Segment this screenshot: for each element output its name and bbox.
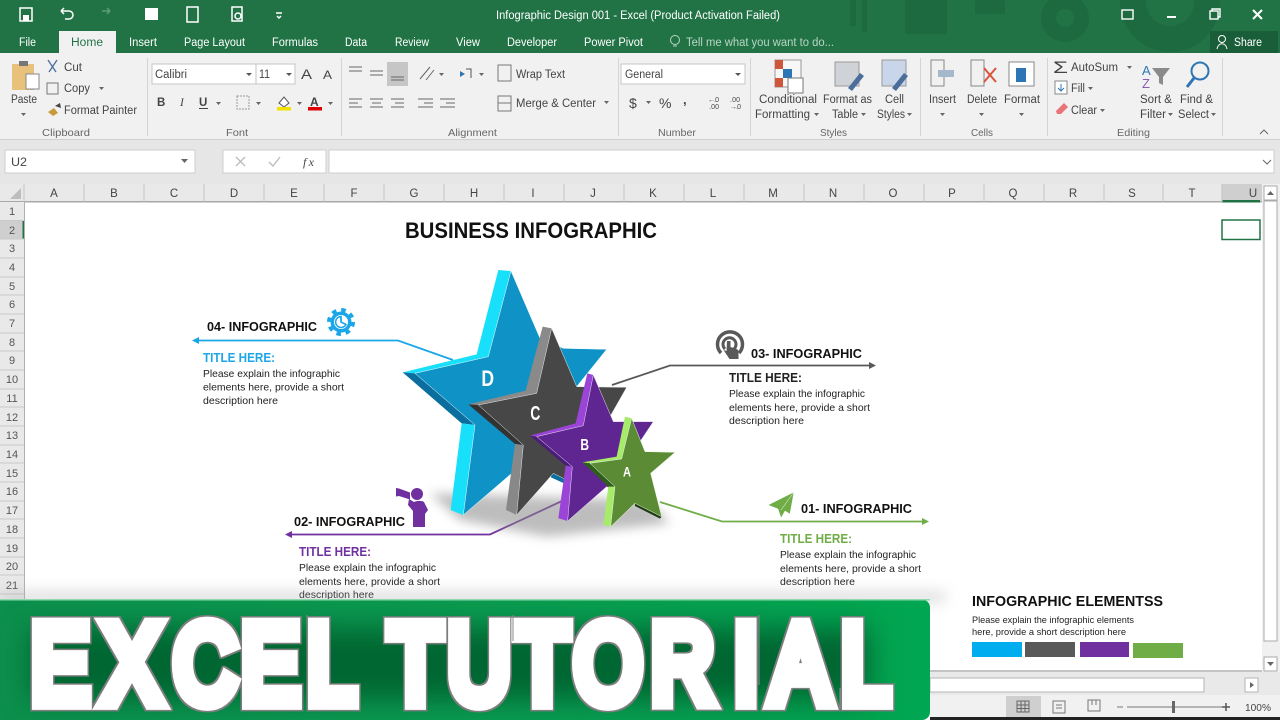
styles group: Styles <box>877 109 905 121</box>
block 02: Please explain the infographic <box>299 562 436 574</box>
number group: $ <box>629 95 637 111</box>
column headers: L <box>710 188 717 200</box>
star B: B <box>580 437 589 454</box>
styles group: Formatting <box>755 109 810 121</box>
block 03 <box>612 332 876 427</box>
column headers: F <box>350 188 358 200</box>
styles group: Table <box>832 109 858 121</box>
block 02: 02- INFOGRAPHIC <box>294 514 406 529</box>
block 01: TITLE HERE: <box>780 531 852 546</box>
status bar: 100% <box>1245 702 1271 714</box>
arrow 03 <box>612 362 876 385</box>
column headers: I <box>531 188 535 200</box>
main heading: BUSINESS INFOGRAPHIC <box>405 218 657 243</box>
window controls <box>1122 9 1262 19</box>
font group: U <box>199 97 207 109</box>
clipboard group: Clipboard <box>42 127 90 139</box>
row headers <box>0 202 24 600</box>
ribbon tabs: Page Layout <box>184 37 246 49</box>
row headers: 14 <box>6 449 18 461</box>
row headers: 9 <box>9 355 15 367</box>
number group: .00 <box>730 97 740 104</box>
block 04: description here <box>203 395 278 407</box>
font group: I <box>179 97 185 109</box>
row headers: 20 <box>6 561 18 573</box>
number group <box>621 64 745 139</box>
row headers: 16 <box>6 486 18 498</box>
number group: Number <box>658 127 696 139</box>
clipboard group: Copy <box>64 83 90 95</box>
ribbon tabs: Tell me what you want to do... <box>686 37 834 49</box>
block 03: 03- INFOGRAPHIC <box>751 346 863 361</box>
editing group: Find & <box>1180 94 1213 106</box>
horizontal scrollbar <box>930 672 1280 695</box>
row headers: 4 <box>9 262 15 274</box>
block 01: 01- INFOGRAPHIC <box>801 501 913 516</box>
block 03: TITLE HERE: <box>729 370 802 385</box>
star D <box>403 270 607 515</box>
row headers: 1 <box>9 206 15 218</box>
font group: B <box>157 97 165 109</box>
row headers: 2 <box>9 225 15 237</box>
row headers: 18 <box>6 524 18 536</box>
row headers: 3 <box>9 243 15 255</box>
3D star graphic <box>403 270 675 537</box>
row headers: 21 <box>6 580 18 592</box>
ribbon <box>0 53 1280 140</box>
alignment group <box>349 62 609 139</box>
window title: Infographic Design 001 - Excel (Product Activation Failed) <box>496 10 780 22</box>
legend: infographic elements <box>972 593 1183 658</box>
block 02: TITLE HERE: <box>299 544 371 559</box>
styles group <box>755 60 912 139</box>
editing group: Clear <box>1071 105 1097 117</box>
selected cell U2 <box>1222 220 1260 240</box>
row headers: 5 <box>9 281 15 293</box>
ribbon tabs: Review <box>395 37 430 49</box>
alignment group: Alignment <box>448 127 497 139</box>
block 03: Please explain the infographic <box>729 388 865 400</box>
block 01: description here <box>780 576 855 588</box>
font group: Calibri <box>155 69 187 81</box>
row headers: 17 <box>6 505 18 517</box>
status bar <box>930 695 1280 720</box>
ribbon tabs <box>19 31 1278 53</box>
clipboard group <box>11 60 137 139</box>
vertical scrollbar <box>930 184 1280 674</box>
legend: infographic elements: INFOGRAPHIC ELEMENTSS <box>972 593 1163 610</box>
font group: A <box>323 70 332 82</box>
styles group: Cell <box>885 94 904 106</box>
column headers: N <box>829 188 837 200</box>
icon: gear <box>329 310 353 334</box>
title bar <box>0 0 1280 53</box>
block 04: Please explain the infographic <box>203 368 340 380</box>
block 01 <box>660 492 929 588</box>
editing group: Select <box>1178 109 1210 121</box>
editing group: A <box>1142 63 1151 78</box>
arrow 04 <box>192 337 453 360</box>
formula bar <box>0 140 1280 184</box>
cells group: Cells <box>971 127 993 139</box>
star C: C <box>530 402 540 425</box>
quick access toolbar <box>20 7 282 22</box>
column headers: P <box>948 188 956 200</box>
row headers: 19 <box>6 543 18 555</box>
row headers: 11 <box>6 393 18 405</box>
number group: % <box>659 95 671 111</box>
editing group: AutoSum <box>1071 62 1118 74</box>
ribbon tabs: View <box>456 37 481 49</box>
editing group: Sort & <box>1140 94 1172 106</box>
row headers: 6 <box>9 299 15 311</box>
styles group: Styles <box>820 127 847 139</box>
icon: paper plane <box>768 492 794 518</box>
font group: Font <box>226 127 248 139</box>
number group: , <box>683 92 687 107</box>
block 04: elements here, provide a short <box>203 382 344 394</box>
column headers: D <box>230 188 238 200</box>
editing group: Z <box>1142 76 1150 91</box>
cells group <box>929 60 1041 139</box>
row headers: 12 <box>6 412 18 424</box>
ribbon tabs: Share <box>1234 37 1262 49</box>
star C <box>468 327 627 515</box>
column headers: Q <box>1009 188 1018 200</box>
cells group: Format <box>1004 94 1041 106</box>
alignment group: Merge & Center <box>516 98 596 110</box>
star B <box>530 373 653 521</box>
number group: →.0 <box>730 104 741 111</box>
row headers: 8 <box>9 337 15 349</box>
block 02 <box>285 488 562 601</box>
column headers: H <box>470 188 478 200</box>
column headers: E <box>290 188 298 200</box>
icon: touch <box>718 332 743 359</box>
star A: A <box>623 465 631 480</box>
number group: ←.0 <box>708 97 719 104</box>
legend: infographic elements: Please explain the infographic elements <box>972 615 1134 626</box>
alignment group: Wrap Text <box>516 69 566 81</box>
editing group: Editing <box>1117 127 1150 139</box>
cells group: Delete <box>967 94 997 106</box>
row headers: 15 <box>6 468 18 480</box>
icon: person with megaphone <box>396 488 428 527</box>
ribbon tabs: Formulas <box>272 37 318 49</box>
block 04 <box>192 310 453 407</box>
editing group: Fill <box>1071 83 1085 95</box>
block 03: description here <box>729 415 804 427</box>
block 03: elements here, provide a short <box>729 402 870 414</box>
block 01: elements here, provide a short <box>780 563 921 575</box>
block 02: elements here, provide a short <box>299 576 440 588</box>
star shadow <box>430 493 670 537</box>
clipboard group: Cut <box>64 62 83 74</box>
ribbon tabs: Insert <box>129 37 158 49</box>
clipboard group: Format Painter <box>64 105 137 117</box>
row headers: 13 <box>6 430 18 442</box>
font group: 11 <box>259 69 270 81</box>
formula bar: U2 <box>11 157 27 169</box>
legend: infographic elements: here, provide a short description here <box>972 627 1126 638</box>
ribbon tabs: Power Pivot <box>584 37 644 49</box>
cells group: Insert <box>929 94 957 106</box>
column headers: C <box>170 188 178 200</box>
styles group: Format as <box>823 94 872 106</box>
column headers: R <box>1069 188 1077 200</box>
ribbon tabs: Developer <box>507 37 557 49</box>
number group: General <box>625 69 663 81</box>
block 01: Please explain the infographic <box>780 549 916 561</box>
column headers: U <box>1249 188 1257 200</box>
block 02: description here <box>299 589 374 601</box>
column headers: O <box>889 188 898 200</box>
arrow 02 <box>285 501 562 538</box>
block 04: 04- INFOGRAPHIC <box>207 319 318 334</box>
font group: A <box>301 66 313 82</box>
title bar background pattern <box>850 0 1220 52</box>
clipboard group: Paste <box>11 94 37 106</box>
ribbon tabs: Data <box>345 37 368 49</box>
column headers: G <box>410 188 419 200</box>
row headers: 7 <box>9 318 15 330</box>
font group <box>152 64 333 139</box>
formula bar: fx <box>303 155 315 169</box>
column headers: B <box>110 188 118 200</box>
star A <box>582 417 675 527</box>
star D: D <box>481 366 494 391</box>
font group: A <box>310 95 319 109</box>
editing group: Σ <box>1053 58 1068 77</box>
editing group: Filter <box>1140 109 1166 121</box>
editing group <box>1053 58 1268 139</box>
column headers: T <box>1188 188 1196 200</box>
column headers: K <box>649 188 657 200</box>
block 04: TITLE HERE: <box>203 350 275 365</box>
ribbon tabs: File <box>19 37 36 49</box>
row headers: 10 <box>6 374 18 386</box>
column headers: J <box>590 188 596 200</box>
number group: .00 <box>709 104 719 111</box>
column headers <box>0 184 1262 202</box>
styles group: Conditional <box>759 94 817 106</box>
column headers: M <box>768 188 778 200</box>
arrow 01 <box>660 502 929 525</box>
column headers: S <box>1128 188 1136 200</box>
ribbon tabs: Home <box>71 37 103 49</box>
column headers: A <box>50 188 58 200</box>
